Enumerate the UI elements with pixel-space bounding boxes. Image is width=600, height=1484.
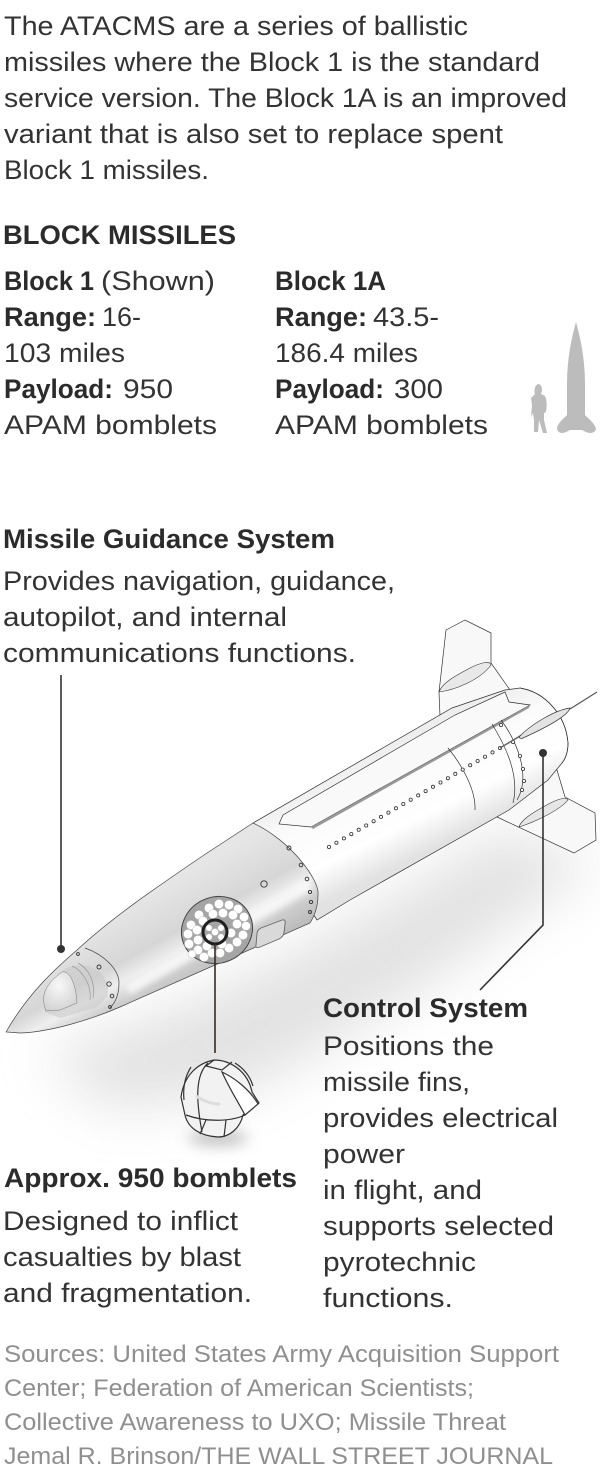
missile body bbox=[253, 688, 568, 920]
block 1A specifications: 186.4 miles bbox=[275, 338, 418, 368]
block 1A specifications: APAM bomblets bbox=[275, 410, 488, 440]
intro paragraph: The ATACMS are a series of ballistic bbox=[4, 11, 468, 41]
bomblet highlight ring bbox=[203, 920, 227, 944]
label: missile guidance system: autopilot, and internal bbox=[3, 602, 287, 632]
block 1A specifications: 43.5- bbox=[373, 302, 439, 332]
block 1 specifications: Block 1 bbox=[4, 266, 94, 296]
long side strake bbox=[279, 692, 530, 827]
intro paragraph: variant that is also set to replace spent bbox=[4, 119, 504, 149]
leader line: control system bbox=[480, 749, 547, 990]
block 1A specifications: Payload: bbox=[275, 374, 384, 404]
missile illustration bbox=[6, 620, 600, 1110]
bomblet bay cutaway bbox=[170, 885, 264, 975]
label: control system: power bbox=[323, 1139, 405, 1169]
label: control system: supports selected bbox=[323, 1211, 554, 1241]
block 1 specifications: 950 bbox=[123, 374, 173, 404]
row of vent holes bbox=[327, 723, 526, 849]
block 1 specifications: APAM bomblets bbox=[4, 410, 217, 440]
block 1 specifications: (Shown) bbox=[101, 266, 215, 296]
label: missile guidance system: Provides navigation, guidance, bbox=[3, 566, 395, 596]
label: missile guidance system bbox=[3, 524, 395, 668]
block 1A specifications: Range: bbox=[275, 302, 367, 332]
lower tail fin bbox=[497, 770, 596, 853]
leader line: bomblets bbox=[214, 944, 216, 1053]
sources and credit: Collective Awareness to UXO; Missile Threat bbox=[4, 1409, 506, 1436]
label: bomblets: Approx. 950 bomblets bbox=[4, 1163, 297, 1193]
block 1 specifications bbox=[4, 266, 217, 440]
block 1 specifications: Payload: bbox=[4, 374, 113, 404]
label: control system bbox=[323, 993, 558, 1313]
section seams bbox=[448, 688, 568, 810]
sources and credit bbox=[4, 1341, 559, 1470]
nose highlight streak bbox=[125, 878, 312, 995]
seeker section bbox=[44, 948, 119, 1018]
nose cone bbox=[6, 823, 318, 1033]
icon: soldier and missile scale silhouette bbox=[531, 322, 596, 433]
label: control system: Control System bbox=[323, 993, 528, 1023]
label: bomblets bbox=[3, 1163, 297, 1308]
label: bomblets: Designed to inflict bbox=[3, 1206, 239, 1236]
heading: block missiles: BLOCK MISSILES bbox=[3, 220, 236, 250]
label: control system: pyrotechnic bbox=[323, 1247, 476, 1277]
antenna fairing bbox=[500, 692, 597, 748]
leader line: guidance system bbox=[57, 675, 65, 953]
block 1A specifications: 300 bbox=[394, 374, 443, 404]
sources and credit: Center; Federation of American Scientists; bbox=[4, 1375, 474, 1402]
intro paragraph bbox=[4, 11, 567, 185]
label: control system: missile fins, bbox=[323, 1067, 470, 1097]
block 1A specifications: Block 1A bbox=[275, 266, 386, 296]
block 1A specifications bbox=[275, 266, 488, 440]
label: control system: Positions the bbox=[323, 1031, 494, 1061]
label: missile guidance system: communications functions. bbox=[3, 638, 356, 668]
block 1 specifications: Range: bbox=[4, 302, 96, 332]
label: control system: provides electrical bbox=[323, 1103, 558, 1133]
upper tail fin bbox=[439, 620, 510, 716]
cone rivets and hatch bbox=[256, 846, 313, 948]
label: control system: functions. bbox=[323, 1283, 453, 1313]
label: missile guidance system: Missile Guidance System bbox=[3, 524, 335, 554]
intro paragraph: missiles where the Block 1 is the standard bbox=[4, 47, 540, 77]
ground shadow bbox=[40, 830, 600, 1110]
label: control system: in flight, and bbox=[323, 1175, 482, 1205]
sources and credit: Sources: United States Army Acquisition Support bbox=[4, 1341, 559, 1368]
sources and credit: Jemal R. Brinson/THE WALL STREET JOURNAL bbox=[4, 1443, 553, 1470]
label: bomblets: casualties by blast bbox=[3, 1242, 242, 1272]
bomblet illustration bbox=[181, 1060, 259, 1146]
intro paragraph: Block 1 missiles. bbox=[4, 155, 209, 185]
block 1 specifications: 103 miles bbox=[4, 338, 125, 368]
block 1 specifications: 16- bbox=[102, 302, 141, 332]
bomblet shadow bbox=[188, 1130, 248, 1146]
intro paragraph: service version. The Block 1A is an improved bbox=[4, 83, 567, 113]
label: bomblets: and fragmentation. bbox=[3, 1278, 252, 1308]
